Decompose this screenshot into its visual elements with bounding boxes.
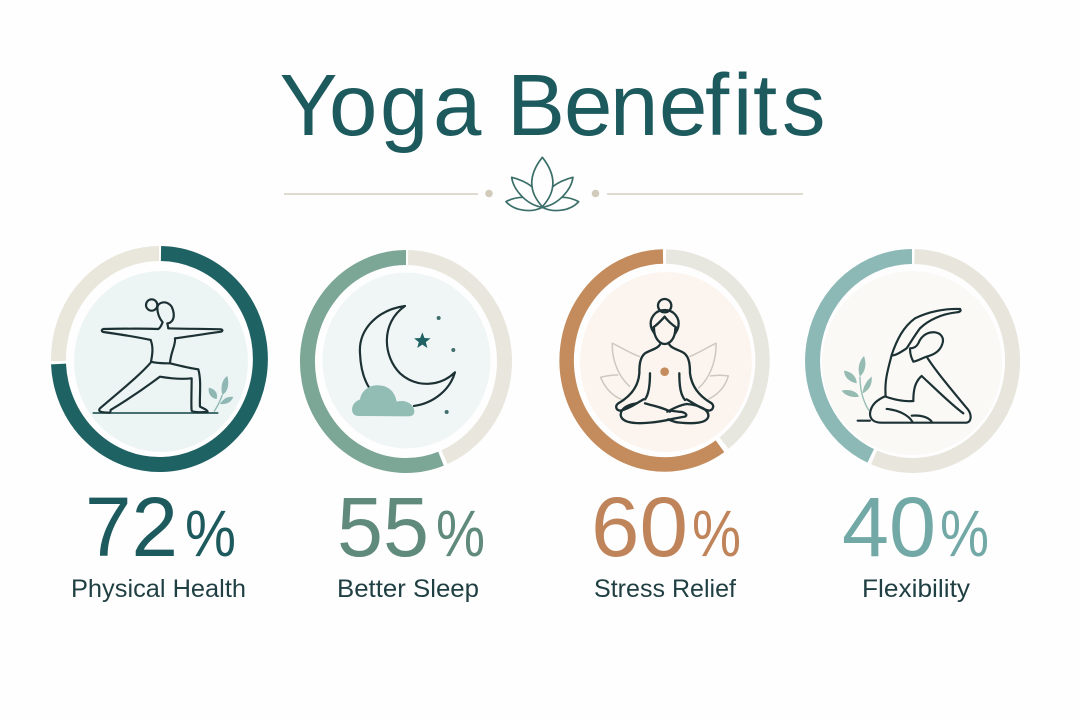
icon: side stretch pose [842,309,971,423]
icon: meditating figure on lotus [601,299,728,423]
value: 60 [591,480,688,574]
panel: better sleep [307,258,504,603]
icon: warrior pose [93,299,233,413]
percent sign: % [436,496,485,570]
inner disc [822,271,1002,455]
title: Yoga Benefits [280,57,826,154]
progress ring 60% [567,256,762,464]
inner disc [322,272,490,448]
progress ring 55% [307,258,504,466]
label: Physical Health [71,575,246,603]
inner disc [74,271,248,452]
percent sign: % [940,496,989,570]
label: Stress Relief [594,575,736,603]
panel: flexibility [813,256,1013,603]
percent sign: % [692,496,741,570]
header divider with lotus [284,157,803,211]
progress ring 40% [813,256,1013,465]
icon: lotus [506,157,579,211]
progress ring 72% [58,254,260,464]
value: 72 [85,480,178,574]
panel: physical health [58,254,260,603]
percent sign: % [185,496,236,570]
label: Better Sleep [337,575,479,603]
icon: moon, star and cloud [352,306,455,416]
value: 55 [337,480,429,574]
label: Flexibility [862,575,971,603]
value: 40 [842,480,936,574]
panel: stress relief [567,256,762,603]
inner disc [580,272,752,452]
